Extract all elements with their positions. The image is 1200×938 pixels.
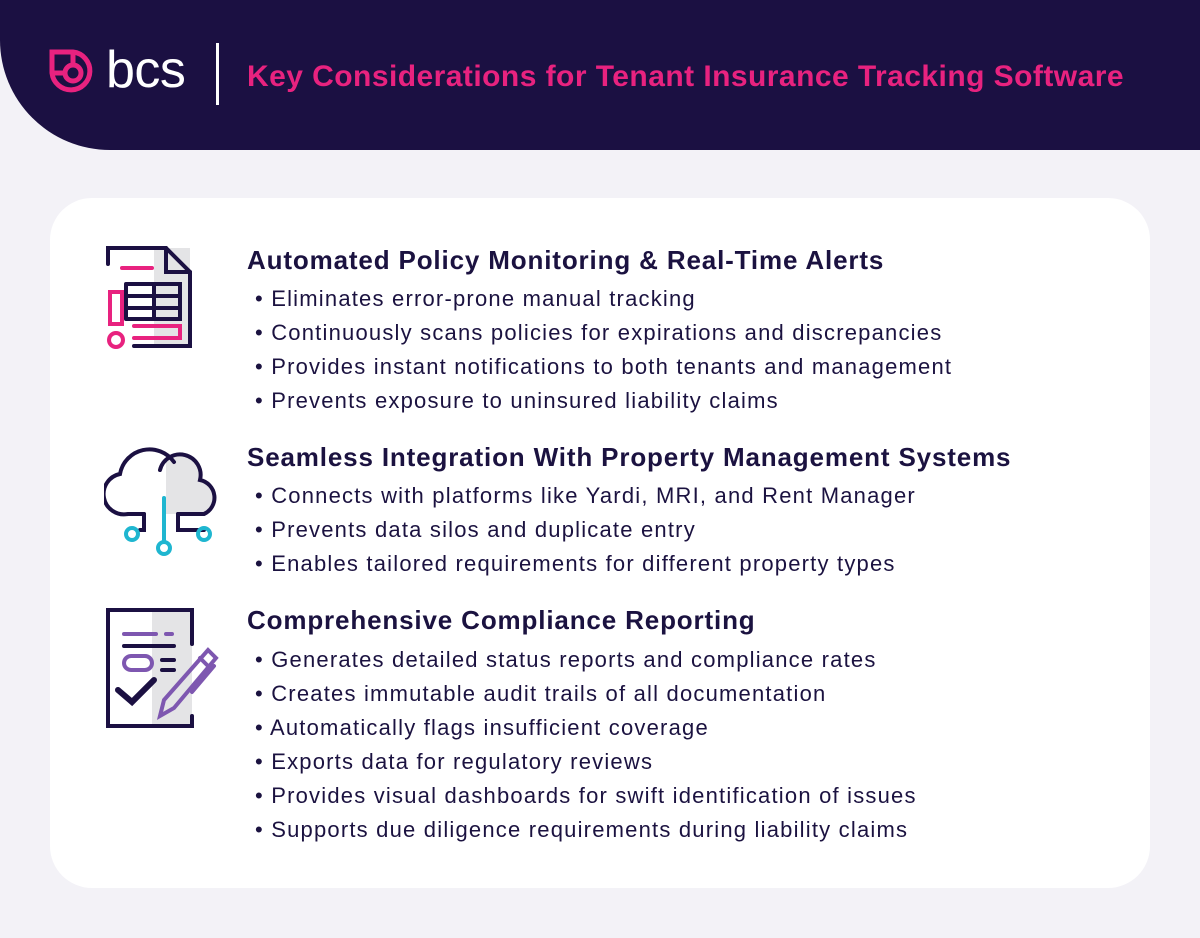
heading 2: Seamless Integration With Property Management Systems — [247, 442, 1011, 472]
bullets 3: • Automatically flags insufficient coverage — [255, 715, 709, 740]
heading 3: Comprehensive Compliance Reporting — [247, 605, 756, 635]
title: Key Considerations for Tenant Insurance Tracking Software — [247, 60, 1124, 93]
content card — [50, 198, 1150, 888]
divider — [216, 43, 219, 105]
logo: bcs — [106, 41, 185, 99]
bullets 3 — [255, 647, 917, 842]
logo — [50, 41, 185, 99]
icon: document with alert — [106, 246, 192, 349]
bullets 3: • Supports due diligence requirements during liability claims — [255, 817, 908, 842]
bullets 2 — [255, 483, 916, 576]
bullets 1: • Continuously scans policies for expirations and discrepancies — [255, 320, 942, 345]
bullets 1: • Prevents exposure to uninsured liability claims — [255, 388, 779, 413]
bullets 3: • Generates detailed status reports and compliance rates — [255, 647, 877, 672]
bullets 3: • Creates immutable audit trails of all documentation — [255, 681, 826, 706]
bullets 1: • Eliminates error-prone manual tracking — [255, 286, 696, 311]
bullets 2: • Prevents data silos and duplicate entry — [255, 517, 696, 542]
bullets 1 — [255, 286, 952, 413]
icon: report with pen — [106, 608, 219, 728]
bullets 3: • Provides visual dashboards for swift identification of issues — [255, 783, 917, 808]
icon: cloud integration — [104, 447, 216, 556]
header band — [0, 0, 1200, 150]
heading 1: Automated Policy Monitoring & Real-Time Alerts — [247, 245, 884, 275]
bullets 2: • Connects with platforms like Yardi, MRI, and Rent Manager — [255, 483, 916, 508]
bullets 3: • Exports data for regulatory reviews — [255, 749, 653, 774]
bullets 1: • Provides instant notifications to both tenants and management — [255, 354, 952, 379]
bullets 2: • Enables tailored requirements for different property types — [255, 551, 896, 576]
